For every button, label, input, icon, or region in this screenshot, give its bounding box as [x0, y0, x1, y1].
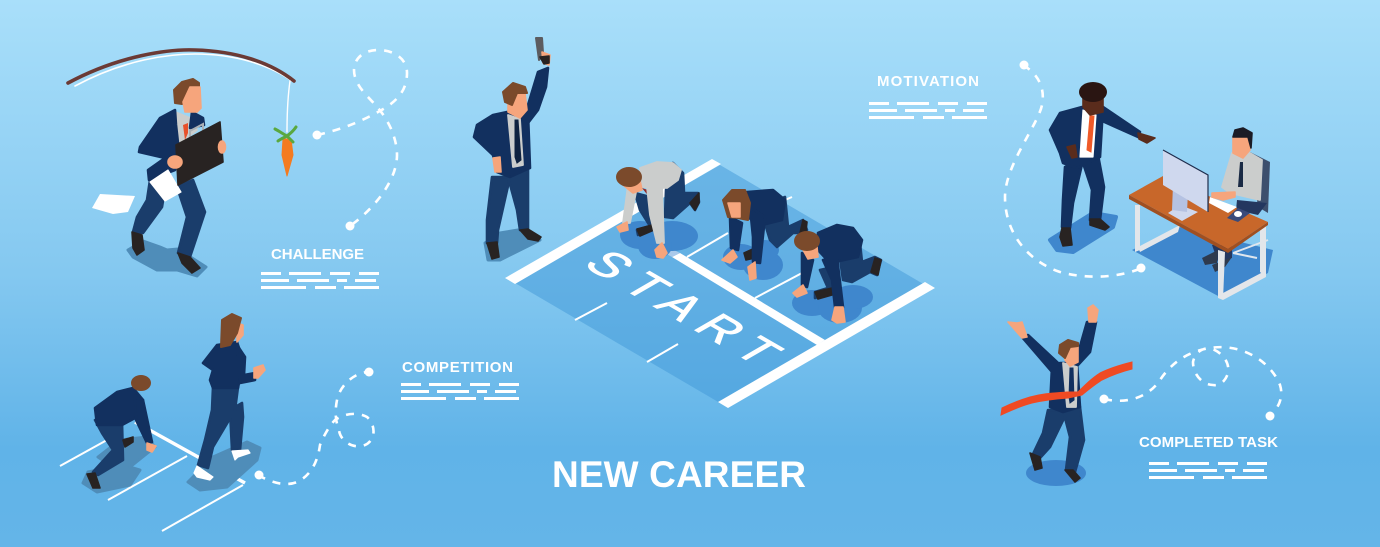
- figure: woman runner: [722, 190, 807, 280]
- figure: runner in grey waistcoat: [617, 162, 699, 259]
- START lettering: START: [572, 244, 793, 372]
- route dots: [1020, 60, 1146, 272]
- pointing boss: [1050, 82, 1155, 252]
- flying paper: [92, 194, 135, 214]
- track surface: [515, 165, 925, 403]
- text lines: [261, 272, 379, 289]
- computer monitor: [1163, 150, 1208, 221]
- figure: third runner: [792, 225, 881, 323]
- route dots: [312, 130, 354, 230]
- finish line: [718, 282, 935, 408]
- figure shadows: [83, 437, 260, 492]
- heading: challenge: CHALLENGE: [271, 246, 364, 263]
- track lines: [60, 422, 245, 531]
- mouse: [1227, 208, 1250, 222]
- panel: challenge: [68, 50, 407, 289]
- dashed route: [1104, 347, 1281, 417]
- text lines: [869, 102, 987, 119]
- keyboard: [1209, 197, 1237, 213]
- dashed route: [317, 50, 407, 226]
- worker torso: [1222, 153, 1262, 200]
- lane tape: [625, 228, 680, 257]
- crouching man: [87, 376, 156, 488]
- desk frame: [1135, 205, 1266, 300]
- worker legs: [1202, 200, 1267, 272]
- dashed route: [258, 372, 374, 484]
- route dots: [254, 368, 374, 480]
- text lines: [1149, 462, 1267, 479]
- businessman with briefcase: [132, 79, 226, 273]
- dashed route: [1005, 65, 1142, 277]
- fishing rod: [68, 50, 294, 132]
- heading: completed task: COMPLETED TASK: [1139, 434, 1278, 451]
- panel: start track: [505, 159, 935, 408]
- panel: completed task: [1001, 305, 1281, 486]
- icon: carrot: [275, 127, 296, 176]
- desk top: [1129, 176, 1268, 249]
- office desk with worker: [1129, 128, 1273, 300]
- lane marks: [575, 197, 802, 362]
- lane divider: [672, 253, 825, 345]
- panel: motivation: [869, 60, 1273, 300]
- panel: competition: [60, 314, 519, 531]
- finisher: [1008, 305, 1098, 486]
- figure: starter with pistol: [474, 38, 550, 260]
- figure shadow: [128, 241, 206, 276]
- finish ribbon: [1001, 362, 1132, 415]
- chair: [1233, 152, 1270, 258]
- running woman: [194, 314, 265, 480]
- heading: motivation: MOTIVATION: [877, 73, 979, 90]
- heading: competition: COMPETITION: [402, 359, 513, 376]
- title: NEW CAREER: [552, 454, 806, 495]
- start line: [505, 159, 721, 284]
- route dots: [1100, 394, 1274, 420]
- text lines: [401, 383, 519, 400]
